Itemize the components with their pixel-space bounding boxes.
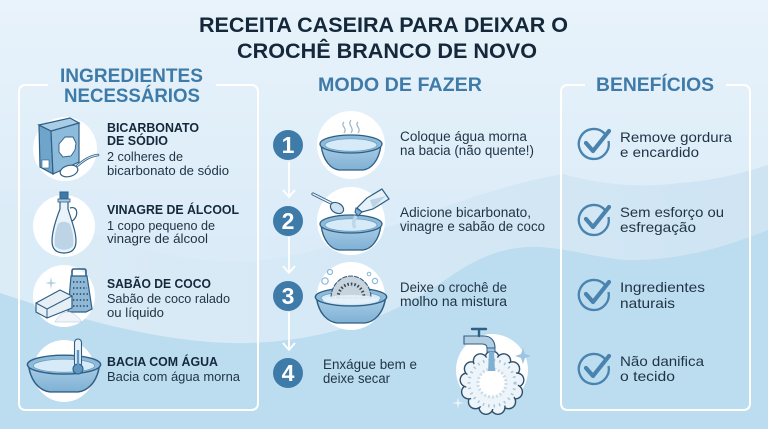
icon: basin with water and thermometer — [27, 339, 101, 402]
icon: coconut soap and grater — [33, 265, 95, 327]
heading: ingredientes: INGREDIENTES — [60, 66, 203, 87]
icon: check — [579, 129, 609, 159]
text: benefit 1: e encardido — [620, 144, 699, 160]
text: step 2 — [400, 205, 545, 234]
text: benefit 2 — [620, 204, 724, 235]
icon: basin with steam — [317, 111, 385, 179]
text: step 3: molho na mistura — [400, 294, 508, 309]
text: benefit 2: Sem esforço ou — [620, 204, 724, 220]
heading: ingredientes — [60, 66, 203, 107]
title: RECEITA CASEIRA PARA DEIXAR O — [199, 14, 568, 37]
text: benefit 4: o tecido — [620, 368, 675, 384]
text: bicarbonato — [107, 121, 229, 178]
benefit 4 — [579, 353, 704, 384]
text: sabao — [107, 276, 230, 320]
text: vinagre: VINAGRE DE ÁLCOOL — [107, 202, 239, 217]
title: CROCHÊ BRANCO DE NOVO — [237, 39, 537, 63]
text: benefit 3 — [620, 279, 705, 311]
icon: adding ingredients to basin — [313, 187, 389, 255]
text: sabao: SABÃO DE COCO — [107, 276, 211, 291]
text: benefit 3: Ingredientes — [620, 279, 705, 295]
step 1 number — [273, 130, 303, 160]
title — [199, 14, 568, 63]
step 4 number — [273, 358, 303, 388]
arrow: step 1 to 2 — [283, 162, 295, 197]
icon: vinegar bottle — [33, 192, 95, 257]
icon: crochet doily under faucet — [452, 329, 531, 416]
benefit 1 — [579, 129, 732, 160]
text: vinagre: vinagre de álcool — [107, 232, 208, 246]
text: bicarbonato: 2 colheres de — [107, 150, 183, 164]
benefit 2 — [579, 204, 724, 235]
step 3 number — [273, 281, 303, 311]
text: bacia: Bacia com água morna — [107, 370, 240, 384]
step 2 number — [273, 206, 303, 236]
text: vinagre: 1 copo pequeno de — [107, 219, 215, 233]
benefit 3 — [579, 279, 705, 311]
icon: check — [579, 280, 609, 310]
text: sabao: ou líquido — [107, 306, 164, 320]
step 1 number: 1 — [282, 132, 295, 158]
icon: check — [579, 354, 609, 384]
icon: crochet soaking in basin — [315, 262, 387, 330]
text: bicarbonato: BICARBONATO — [107, 121, 199, 135]
text: benefit 4: Não danifica — [620, 353, 704, 369]
step 3 number: 3 — [282, 283, 294, 309]
text: bacia: BACIA COM ÁGUA — [107, 354, 218, 369]
text: vinagre — [107, 202, 239, 246]
icon: baking soda box — [33, 117, 98, 181]
text: step 1: Coloque água morna — [400, 129, 527, 144]
panel: beneficios — [561, 74, 750, 410]
panel frame: beneficios — [561, 85, 750, 410]
text: benefit 4 — [620, 353, 704, 384]
icon: check — [579, 205, 609, 235]
text: step 4: Enxágue bem e — [323, 357, 417, 372]
heading: modo de fazer: MODO DE FAZER — [318, 75, 482, 96]
text: sabao: Sabão de coco ralado — [107, 292, 230, 306]
heading: ingredientes: NECESSÁRIOS — [64, 85, 200, 107]
step 2 number: 2 — [282, 208, 294, 234]
text: step 2: Adicione bicarbonato, — [400, 205, 531, 220]
text: step 4 — [323, 357, 417, 386]
text: step 4: deixe secar — [323, 371, 390, 386]
text: benefit 1 — [620, 129, 732, 160]
text: benefit 3: naturais — [620, 295, 675, 311]
text: bicarbonato: DE SÓDIO — [107, 133, 168, 148]
text: benefit 2: esfregação — [620, 219, 696, 235]
heading: beneficios: BENEFÍCIOS — [596, 74, 714, 96]
panel: ingredientes — [19, 66, 258, 410]
text: step 1 — [400, 129, 534, 158]
panel frame: ingredientes — [19, 85, 258, 410]
arrow: step 2 to 3 — [283, 237, 295, 273]
text: bacia — [107, 354, 240, 384]
text: step 1: na bacia (não quente!) — [400, 143, 534, 158]
text: bicarbonato: bicarbonato de sódio — [107, 164, 229, 178]
panel: modo de fazer — [273, 75, 545, 416]
arrow: step 3 to 4 — [283, 312, 295, 350]
text: benefit 1: Remove gordura — [620, 129, 732, 145]
text: step 3: Deixe o crochê de — [400, 280, 507, 295]
text: step 2: vinagre e sabão de coco — [400, 219, 545, 234]
step 4 number: 4 — [282, 360, 295, 386]
text: step 3 — [400, 280, 508, 309]
